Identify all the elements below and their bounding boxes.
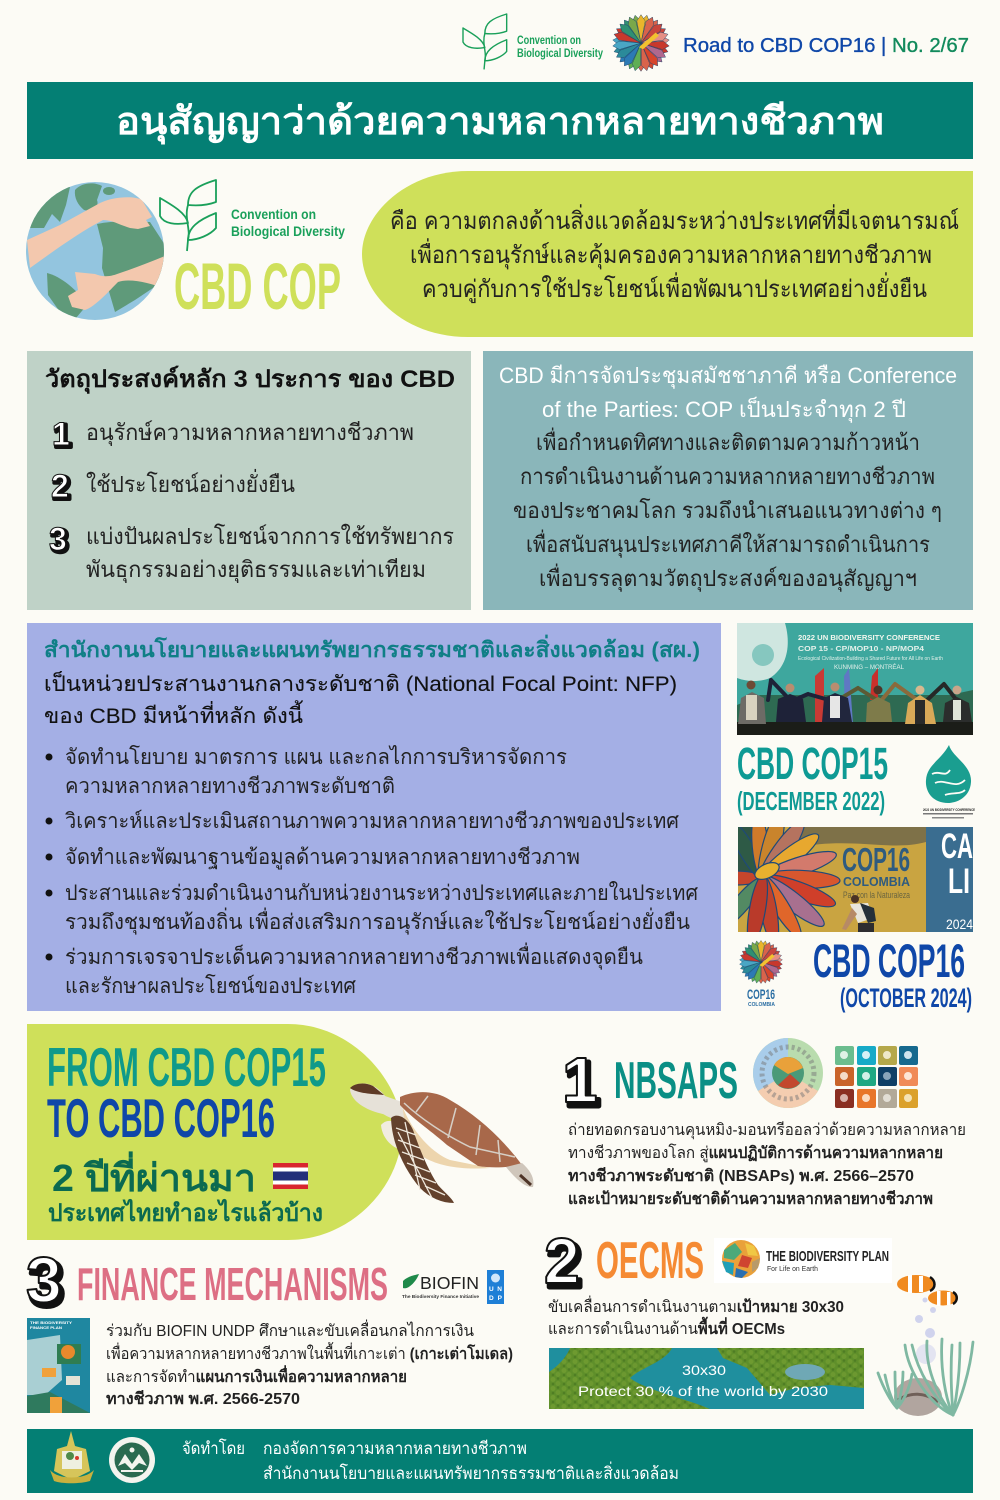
seagrass [878, 1339, 973, 1415]
item 3 [49, 521, 454, 583]
illustration: sea turtle [350, 1083, 533, 1203]
bullet list: รวมถึงชุมชนท้องถิ่น เพื่อส่งเสริมการอนุรักษ์และใช้ประโยชน์อย่างยั่งยืน [65, 907, 690, 935]
neck and head [350, 1083, 404, 1120]
body text: ทางชีวภาพระดับชาติ (NBSAPs) พ.ศ. 2566–2570 [568, 1166, 914, 1185]
subheading: what has Thailand done: ประเทศไทยทำอะไรแล้วบ้าง [48, 1198, 323, 1227]
panel: COP explanation: of the Parties: COP เป็นประจำทุก 2 ปี [542, 395, 906, 423]
logo: The Biodiversity Plan: For Life on Earth [767, 1264, 818, 1273]
item 2: 2 [53, 470, 71, 506]
heading: TO CBD COP16: TO CBD COP16 [47, 1087, 275, 1149]
CBD logo wordmark [517, 35, 603, 60]
body text: ทางชีวภาพของโลก สู่แผนปฏิบัติการด้านความหลากหลาย [568, 1143, 943, 1163]
title banner: อนุสัญญาว่าด้วยความหลากหลายทางชีวภาพ [116, 101, 884, 145]
panel: national focal point duties [27, 623, 721, 1011]
panel: COP explanation: เพื่อกำหนดทิศทางและติดตามความก้าวหน้า [536, 427, 920, 455]
body text: ถ่ายทอดกรอบงานคุนหมิง-มอนทรีออลว่าด้วยความหลากหลาย [568, 1121, 966, 1140]
far flipper [381, 1121, 405, 1150]
icon grid: global targets [835, 1046, 918, 1108]
photo banner: 30x30 mangrove [549, 1348, 864, 1409]
item 1 [52, 416, 414, 454]
panel: definition pill [362, 171, 973, 337]
panel: definition pill: ควบคู่กับการใช้ประโยชน์เพื่อพัฒนาประเทศอย่างยั่งยืน [422, 272, 927, 304]
CBD logo wordmark: Convention on [517, 35, 581, 47]
icon: Thai flag [273, 1163, 308, 1189]
item 3: แบ่งปันผลประโยชน์จากการใช้ทรัพยากร [86, 523, 454, 549]
photo: COP16 Colombia banner: COP16 [842, 841, 910, 878]
photo: COP15 conference [737, 623, 973, 735]
CBD logo [160, 180, 345, 251]
icon: ministry crest [50, 1431, 94, 1483]
photo: COP16 Colombia banner: CA [941, 827, 973, 866]
photo: COP16 Colombia banner: 2024 [946, 916, 973, 932]
footer band [27, 1429, 973, 1493]
logo: UNDP: UN [489, 1286, 502, 1293]
item 1: 1 [54, 418, 72, 454]
heading: CBD COP: CBD COP [174, 249, 341, 323]
photo: COP15 conference: 2022 UN BIODIVERSITY CONFERENCE [798, 633, 940, 642]
logo: BIOFIN: BIOFIN [420, 1273, 479, 1293]
photo: COP15 conference: KUNMING – MONTRÉAL [834, 664, 905, 671]
series label: Road to CBD COP16 | No. 2/67 [683, 35, 969, 57]
bullet list: จัดทำและพัฒนาฐานข้อมูลด้านความหลากหลายทางชีวภาพ [65, 846, 580, 870]
report cover: FINANCE PLAN [30, 1326, 62, 1330]
bubbles [915, 1298, 936, 1364]
heading: FROM CBD COP15: FROM CBD COP15 [47, 1036, 326, 1098]
icon: CBD leaf logo [463, 14, 507, 69]
body text [548, 1295, 844, 1338]
logo: UNDP: DP [489, 1295, 503, 1302]
heading: FINANCE MECHANISMS: FINANCE MECHANISMS [77, 1258, 388, 1310]
body text: ขับเคลื่อนการดำเนินงานตามเป้าหมาย 30x30 [548, 1295, 844, 1316]
panel: COP explanation: CBD มีการจัดประชุมสมัชชาภาคี หรือ Conference [499, 363, 957, 389]
logo: The Biodiversity Plan [714, 1238, 892, 1283]
photo: COP15 conference: Ecological Civilization-Building a Shared Future for All Life on Earth [798, 656, 943, 662]
numeral 2: 2 [544, 1225, 580, 1297]
label: CBD COP16 [735, 934, 972, 1013]
item 3: 3 [51, 523, 69, 559]
panel: definition pill: คือ ความตกลงด้านสิ่งแวดล้อมระหว่างประเทศที่มีเจตนารมณ์ [390, 204, 959, 235]
photo: COP16 Colombia banner: Paz con la Naturaleza [843, 890, 910, 900]
panel: COP explanation: ของประชาคมโลก รวมถึงนำเสนอแนวทางต่าง ๆ [513, 498, 942, 523]
credit text: กองจัดการความหลากหลายทางชีวภาพ [263, 1439, 527, 1458]
panel: COP explanation: เพื่อสนับสนุนประเทศภาคีให้สามารถดำเนินการ [526, 529, 930, 558]
belly [403, 1108, 490, 1169]
logo: BIOFIN: The Biodiversity Finance Initiative [402, 1294, 480, 1299]
heading: NBSAPS: NBSAPS [614, 1052, 738, 1110]
label: CBD COP15: CBD COP15 [737, 738, 888, 789]
clownfish [897, 1275, 958, 1306]
bullet list: วิเคราะห์และประเมินสถานภาพความหลากหลายทางชีวภาพของประเทศ [65, 809, 680, 833]
mural flower [738, 827, 841, 932]
bullet list: จัดทำนโยบาย มาตรการ แผน และกลไกการบริหารจัดการ [65, 745, 567, 769]
panel: COP explanation: เพื่อบรรลุตามวัตถุประสงค์ของอนุสัญญาฯ [539, 563, 917, 592]
illustration: hands embracing globe [26, 180, 345, 323]
bullet list: ร่วมการเจรจาประเด็นความหลากหลายทางชีวภาพเพื่อแสดงจุดยืน [65, 942, 643, 970]
section 1: NBSAPs [562, 1038, 966, 1208]
section 3: finance mechanisms [26, 1244, 513, 1413]
logo: BIOFIN [402, 1273, 480, 1299]
CBD logo wordmark: Biological Diversity [517, 48, 603, 60]
photo: COP16 Colombia banner [738, 827, 973, 932]
bullet list: และรักษาผลประโยชน์ของประเทศ [65, 974, 357, 998]
icon: COP15 logo [923, 745, 975, 818]
heading: สำนักงานนโยบายและแผนทรัพยากรธรรมชาติและสิ่งแวดล้อม (สผ.) [44, 634, 700, 662]
numeral 1: 1 [565, 1048, 601, 1120]
logo: The Biodiversity Plan: THE BIODIVERSITY PLAN [766, 1248, 889, 1265]
numeral 2: 2 [547, 1229, 583, 1301]
panel: national focal point duties: ของ CBD มีหน้าที่หลัก ดังนี้ [44, 700, 303, 728]
credit text: สำนักงานนโยบายและแผนทรัพยากรธรรมชาติและสิ่งแวดล้อม [263, 1461, 679, 1483]
numeral 1: 1 [562, 1044, 598, 1116]
photo banner: 30x30 mangrove: 30x30 [682, 1362, 726, 1378]
item 1: 1 [52, 416, 70, 452]
numeral 3: 3 [26, 1244, 62, 1316]
body text [568, 1121, 966, 1208]
panel: 3 main objectives [27, 351, 471, 610]
item 3: พันธุกรรมอย่างยุติธรรมและเท่าเทียม [86, 557, 426, 583]
photo banner: 30x30 mangrove: Protect 30 % of the world by 2030 [578, 1383, 828, 1399]
label: CBD COP15 [737, 738, 888, 816]
front flipper [391, 1116, 454, 1203]
panel: definition pill: เพื่อการอนุรักษ์และคุ้มครองความหลากหลายทางชีวภาพ [410, 238, 932, 270]
photo: COP15 conference: COP 15 - CP/MOP10 - NP/MOP4 [798, 644, 925, 653]
body text: และเป้าหมายระดับชาติด้านความหลากหลายทางชีวภาพ [568, 1189, 933, 1208]
CBD logo: Convention on [231, 206, 316, 222]
title banner [27, 82, 973, 159]
icon: COP16 flower [607, 9, 675, 77]
item 2 [51, 468, 295, 506]
credit text: จัดทำโดย [182, 1438, 245, 1458]
rear flipper [506, 1163, 533, 1187]
rock [894, 1378, 942, 1416]
body text: และการจัดทำแผนการเงินเพื่อความหลากหลาย [106, 1365, 407, 1386]
item 3: 3 [49, 521, 67, 557]
item 2: ใช้ประโยชน์อย่างยั่งยืน [86, 468, 295, 497]
panel: COP explanation [483, 351, 973, 610]
bullet list [46, 745, 699, 998]
icon: COP16 logo: COP16 [747, 986, 775, 1002]
icon: COP16 logo [735, 936, 787, 1008]
report cover: THE BIODIVERSITY [30, 1321, 73, 1325]
section 2: OECMs [544, 1225, 892, 1409]
body text: ทางชีวภาพ พ.ศ. 2566-2570 [106, 1389, 300, 1408]
icon: COP16 logo: COLOMBIA [748, 1002, 775, 1008]
bullet list: ประสานและร่วมดำเนินงานกับหน่วยงานระหว่างประเทศและภายในประเทศ [65, 881, 699, 905]
label: CBD COP15: (DECEMBER 2022) [737, 786, 885, 816]
logo: UNDP [487, 1270, 504, 1304]
body text: ร่วมกับ BIOFIN UNDP ศึกษาและขับเคลื่อนกลไกการเงิน [106, 1319, 474, 1340]
subheading: เป็นหน่วยประสานงานกลางระดับชาติ (National Focal Point: NFP) [44, 669, 677, 696]
icon: COP15 logo: 2022 UN BIODIVERSITY CONFERENCE [923, 808, 975, 812]
icon: framework wheel [753, 1038, 823, 1108]
heading: OECMS: OECMS [596, 1232, 704, 1290]
CBD logo: Biological Diversity [231, 223, 345, 239]
item 2: 2 [51, 468, 69, 504]
heading: วัตถุประสงค์หลัก 3 ประการ ของ CBD [45, 365, 455, 395]
credit text [182, 1438, 679, 1483]
body text: เพื่อความหลากหลายทางชีวภาพในพื้นที่เกาะเต่า (เกาะเต่าโมเดล) [106, 1342, 513, 1363]
photo: COP16 Colombia banner: COLOMBIA [843, 874, 911, 889]
bullet list: ความหลากหลายทางชีวภาพระดับชาติ [65, 775, 395, 798]
body text [106, 1319, 513, 1408]
shell [400, 1092, 522, 1167]
cyclist [842, 895, 876, 932]
panel: from COP15 to COP16 [27, 1024, 402, 1240]
conference delegates [738, 680, 972, 724]
body text: และการดำเนินงานด้านพื้นที่ OECMs [548, 1316, 785, 1338]
numeral 3: 3 [29, 1248, 65, 1320]
panel: COP explanation: การดำเนินงานด้านความหลากหลายทางชีวภาพ [520, 464, 935, 489]
report cover [27, 1318, 90, 1413]
item 1: อนุรักษ์ความหลากหลายทางชีวภาพ [86, 419, 414, 446]
icon: ONEP seal [109, 1437, 155, 1483]
header: logos and series label [463, 9, 969, 77]
subheading: 2 years: 2 ปีที่ผ่านมา [52, 1151, 256, 1200]
photo: COP16 Colombia banner: LI [948, 862, 970, 901]
illustration: clownfish, bubbles and seagrass [878, 1275, 973, 1416]
